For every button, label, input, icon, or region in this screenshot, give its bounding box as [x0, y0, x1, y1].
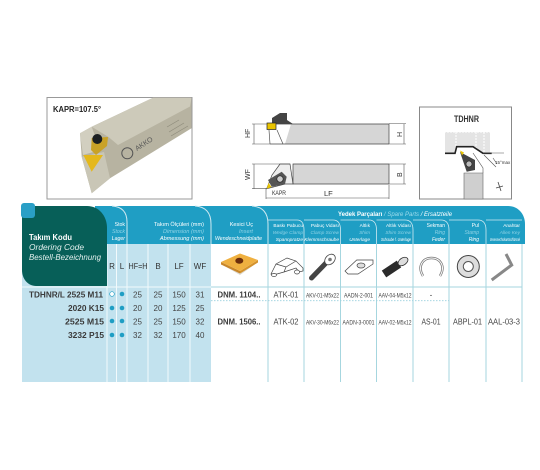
header: stamp ring: Ring	[469, 237, 479, 243]
table header band	[95, 206, 525, 244]
icon: wedge clamp	[271, 258, 303, 276]
header: tool dimensions: Takım Ölçüleri (mm)	[154, 221, 204, 228]
header: insert: Kesici Uç	[230, 222, 253, 228]
header: shim: Shim	[359, 230, 370, 236]
dimension: H: H	[397, 132, 404, 137]
title: Ordering Code: Ordering Code	[29, 242, 84, 252]
tab dividers	[112, 206, 268, 244]
header: insert: Insert	[239, 229, 253, 235]
header: stamp ring: Pul	[472, 223, 479, 229]
direction arrows	[496, 182, 503, 191]
icon: stamp ring	[457, 256, 479, 278]
dimension values: 20	[154, 304, 163, 313]
header: shim: Unterlage	[349, 237, 370, 243]
dimension values: 25	[196, 304, 205, 313]
table body: spare part grid	[211, 220, 522, 382]
icon: shim	[345, 260, 373, 274]
insert codes: DNM. 1506..	[218, 318, 260, 326]
icon: akko logo	[122, 148, 133, 159]
dimension values: 25	[133, 318, 142, 326]
column headings	[109, 262, 206, 271]
header: insert	[215, 222, 262, 242]
spare part codes row 1: -	[430, 290, 433, 300]
spare part codes row 2: ABPL-01	[453, 318, 482, 326]
spare part codes row 2	[274, 318, 521, 326]
spare part codes row 2: AAL-03-3	[488, 318, 521, 326]
dimension: HF: HF	[245, 129, 252, 138]
ordering codes: 3232 P15	[68, 331, 105, 340]
title: Bestell-Bezeichnung: Bestell-Bezeichnung	[29, 252, 101, 262]
header: shim screw: Schraube f. Unterlage	[381, 237, 411, 243]
header: shim	[349, 223, 371, 243]
dimension values: 25	[133, 290, 142, 300]
dimension values: 20	[133, 304, 142, 313]
header: ring: Sekman	[427, 223, 445, 229]
dimension values: 32	[154, 331, 163, 340]
icon: allen key	[492, 254, 512, 280]
dimension values: 150	[172, 318, 186, 326]
header: clamp screw: Clamp Screw	[310, 230, 340, 236]
ordering codes	[29, 290, 105, 340]
column headings: B	[155, 262, 161, 271]
spare part codes row 1: ATK-01	[274, 290, 299, 300]
header: stock: Stock	[112, 229, 125, 235]
column headings: R	[109, 262, 115, 271]
header: allen key	[490, 223, 521, 243]
dimension values: 150	[172, 290, 186, 300]
spare part codes row 2: ATK-02	[274, 318, 299, 326]
dimension values: 25	[154, 290, 163, 300]
header: shim screw	[381, 223, 412, 243]
title: Takım Kodu: Takım Kodu	[29, 232, 72, 242]
header: shim screw: Shim Screw	[385, 230, 412, 236]
dimension: WF: WF	[245, 169, 252, 180]
header: shim: Altlık	[360, 223, 371, 229]
spare part codes row 2: AADN-3-0001	[342, 320, 375, 326]
icon: clamp and screw	[83, 134, 108, 172]
header: wedge clamp	[273, 223, 303, 243]
header: tool dimensions: Abmessung (mm)	[159, 236, 204, 242]
column headings: LF	[174, 262, 184, 271]
header: wedge clamp: Spannpratze	[276, 237, 303, 243]
header: shim screw: Altlık Vidası	[386, 223, 411, 229]
icon: shim screw	[384, 255, 410, 274]
header: wedge clamp: Baskı Pabucu	[273, 223, 303, 229]
header: spare parts: Yedek Parçaları / Spare Parts / Ersatzteile	[338, 212, 453, 218]
spare part codes row 1: AKV-01-M5x22	[306, 292, 339, 300]
icon: ring	[421, 258, 442, 276]
diagram title: TDHNR	[454, 114, 479, 124]
dimension values: 125	[172, 304, 186, 313]
dimension: B: B	[397, 172, 404, 177]
icon: clamp screw	[312, 252, 337, 278]
panel: product photo	[47, 98, 192, 199]
brand text: AKKO	[134, 136, 155, 153]
insert codes: DNM. 1104..	[218, 290, 260, 300]
header: tool dimensions: Dimension (mm)	[163, 229, 204, 235]
header: ring	[427, 223, 445, 243]
ordering codes: 2525 M15	[65, 318, 105, 326]
header: ring: Feder	[432, 237, 445, 243]
dimension: LF: LF	[324, 189, 333, 198]
spare part codes row 2: AKV-30-M6x22	[306, 320, 339, 326]
dimension values: 170	[172, 331, 186, 340]
spare part codes row 2: AAV-02-M5x12	[378, 320, 412, 326]
header: insert: Wendeschneidplatte	[215, 236, 262, 242]
header: clamp screw: Klemmschraube	[304, 237, 339, 243]
insert codes	[218, 290, 260, 326]
header: ring: Ring	[435, 230, 445, 236]
header: tool dimensions	[154, 221, 204, 242]
insert image	[221, 254, 258, 275]
technical drawing: top view	[245, 164, 406, 199]
photo label: KAPR=107.5°	[53, 105, 101, 114]
tab icon	[21, 203, 35, 218]
column headings: WF	[194, 262, 206, 271]
header: wedge clamp: Wedge Clamp	[273, 230, 303, 236]
stock dots	[110, 292, 124, 337]
header: stock	[112, 222, 125, 242]
technical drawing: side view	[245, 113, 406, 144]
spare part codes row 1: AAV-04-M5x12	[378, 292, 412, 300]
dimension values	[133, 290, 205, 340]
dimension values: 31	[196, 290, 205, 300]
table body: blue columns	[22, 244, 211, 382]
dimension: KAPR: KAPR	[272, 190, 286, 197]
engraved details	[167, 120, 188, 136]
panel: ordering code heading	[21, 203, 107, 286]
column headings: HF=H	[128, 262, 148, 271]
spare part codes row 1: AADN-2-001	[344, 292, 373, 300]
header: allen key: Anahtar	[503, 223, 520, 229]
angle label: 15°max	[495, 160, 511, 165]
ordering codes: 2020 K15	[68, 304, 105, 313]
spare part codes row 1	[274, 290, 433, 300]
spare part codes row 2: AS-01	[422, 318, 441, 326]
panel: TDHNR machining diagram	[420, 107, 512, 199]
dimension values: 25	[154, 318, 163, 326]
ordering codes: TDHNR/L 2525 M11	[29, 290, 104, 300]
dimension values: 32	[133, 331, 142, 340]
dimension values: 40	[196, 331, 205, 340]
column headings: L	[120, 262, 125, 271]
header: stamp ring: Stamp	[465, 230, 479, 236]
header: clamp screw: Pabuç Vidası	[311, 223, 339, 229]
dimension values: 32	[196, 318, 205, 326]
header: stock: Stok	[115, 222, 125, 228]
header: stamp ring	[465, 223, 479, 243]
header: clamp screw	[304, 223, 340, 243]
header: allen key: Allen Key	[499, 230, 521, 236]
header: stock: Lager	[112, 236, 125, 242]
